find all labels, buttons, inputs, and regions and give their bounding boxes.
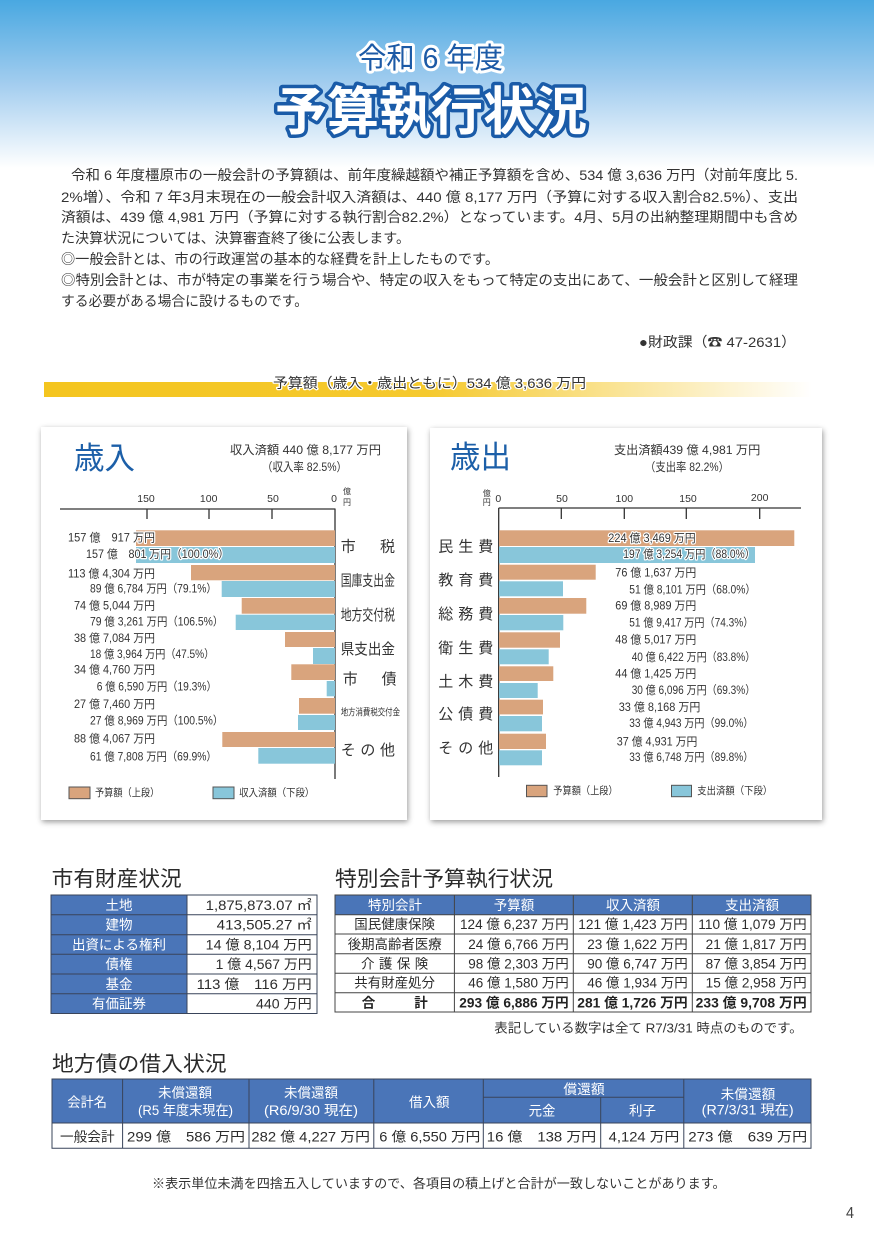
table: municipal property: 有価証券 xyxy=(92,997,146,1012)
intro text block: 令和 6 年度橿原市の一般会計の予算額は、前年度繰越額や補正予算額を含め、534 億 3,636 万円（対前年度比 5. xyxy=(71,167,798,183)
table: local bonds: 299 億 586 万円 xyxy=(127,1130,245,1144)
table: local bonds: 282 億 4,227 万円 xyxy=(251,1130,370,1144)
revenue legend: 収入済額（下段） xyxy=(239,786,314,799)
revenue categories: 地方交付税 xyxy=(341,607,395,624)
table: special accounts: 87 億 3,854 万円 xyxy=(706,956,807,972)
expenditure values: 51 億 9,417 万円（74.3%） xyxy=(629,616,753,629)
panel: expenditure xyxy=(430,428,822,820)
table: municipal property: 440 万円 xyxy=(256,997,312,1012)
heading: special accounts: 特別会計予算執行状況 xyxy=(335,868,553,891)
expenditure values: 33 億 6,748 万円（89.8%） xyxy=(629,751,753,764)
revenue categories: 市税 xyxy=(341,538,395,556)
expenditure legend: 支出済額（下段） xyxy=(697,784,772,797)
panel: revenue xyxy=(41,427,407,820)
expenditure axis: 0 xyxy=(495,493,501,505)
revenue values: 88 億 4,067 万円 xyxy=(74,733,155,746)
table: local bonds: 一般会計 xyxy=(60,1130,115,1144)
expenditure values: 40 億 6,422 万円（83.8%） xyxy=(632,651,755,664)
expenditure axis: 億 xyxy=(483,488,491,498)
revenue categories: 市債 xyxy=(343,671,397,688)
expenditure values: 224 億 3,469 万円 xyxy=(608,532,696,545)
table: special accounts: 国民健康保険 xyxy=(354,916,435,932)
expenditure axis: 150 xyxy=(679,493,697,505)
table: special accounts: 23 億 1,622 万円 xyxy=(587,937,688,952)
table: municipal property: 土地 xyxy=(106,898,133,913)
table: special accounts: 共有財産処分 xyxy=(354,976,435,991)
expenditure values: 69 億 8,989 万円 xyxy=(615,600,696,613)
expenditure categories: 衛生費 xyxy=(438,640,493,657)
revenue axis: 0 xyxy=(331,493,337,505)
revenue values: 61 億 7,808 万円（69.9%） xyxy=(90,750,217,763)
revenue summary: （収入率 82.5%） xyxy=(262,460,347,474)
revenue categories: その他 xyxy=(341,742,395,759)
expenditure values: 44 億 1,425 万円 xyxy=(615,667,696,680)
page number: 4 xyxy=(846,1205,854,1222)
expenditure bars xyxy=(499,530,794,765)
table: special accounts: 98 億 2,303 万円 xyxy=(468,956,569,972)
expenditure axis: 円 xyxy=(483,498,491,507)
table: local bonds: 元金 xyxy=(529,1104,556,1118)
table: special accounts xyxy=(335,895,811,1012)
revenue values: 6 億 6,590 万円（19.3%） xyxy=(97,680,217,693)
expenditure categories: 公債費 xyxy=(438,706,493,723)
expenditure legend xyxy=(526,784,772,797)
revenue values: 34 億 4,760 万円 xyxy=(74,663,155,676)
table: municipal property: 基金 xyxy=(106,976,133,992)
revenue axis xyxy=(60,486,351,779)
contact: finance section: ●財政課（☎ 47-2631） xyxy=(639,334,796,350)
table: municipal property xyxy=(51,895,317,1014)
table: municipal property: 建物 xyxy=(106,918,132,933)
revenue summary xyxy=(230,443,381,474)
revenue values: 79 億 3,261 万円（106.5%） xyxy=(90,616,223,629)
header gradient background xyxy=(0,0,874,168)
expenditure values: 48 億 5,017 万円 xyxy=(615,633,696,646)
budget total banner: 予算額（歳入・歳出ともに）534 億 3,636 万円 xyxy=(273,375,586,391)
intro text block: 2%増）、令和 7 年3月末現在の一般会計収入済額は、440 億 8,177 万円（予算に対する収入割合82.5%）、支出 xyxy=(61,189,798,205)
heading: revenue: 歳入 xyxy=(74,441,135,476)
revenue legend xyxy=(69,786,314,799)
table: local bonds: 未償還額 xyxy=(284,1086,338,1100)
expenditure values: 76 億 1,637 万円 xyxy=(615,567,696,580)
expenditure categories: その他 xyxy=(438,740,493,757)
footnote: ※表示単位未満を四捨五入していますので、各項目の積上げと合計が一致しないことがあります。 xyxy=(152,1176,726,1191)
expenditure values: 37 億 4,931 万円 xyxy=(617,736,697,749)
table: special accounts: 110 億 1,079 万円 xyxy=(698,917,807,932)
title xyxy=(275,42,587,142)
table: special accounts: 293 億 6,886 万円 xyxy=(459,994,569,1010)
table: special accounts: 支出済額 xyxy=(725,898,779,913)
heading: local bonds: 地方債の借入状況 xyxy=(52,1053,227,1076)
table: special accounts: 233 億 9,708 万円 xyxy=(696,994,807,1010)
revenue values: 157 億 801 万円（100.0%） xyxy=(86,548,229,561)
expenditure categories: 民生費 xyxy=(438,538,493,556)
expenditure axis xyxy=(483,488,801,777)
table: local bonds: 273 億 639 万円 xyxy=(688,1130,807,1144)
revenue values: 27 億 8,969 万円（100.5%） xyxy=(90,714,223,727)
revenue values: 113 億 4,304 万円 xyxy=(68,567,155,580)
revenue legend: 予算額（上段） xyxy=(95,786,159,799)
expenditure values: 33 億 4,943 万円（99.0%） xyxy=(629,717,753,730)
revenue values: 89 億 6,784 万円（79.1%） xyxy=(90,583,217,596)
table: special accounts: 281 億 1,726 万円 xyxy=(577,994,688,1010)
revenue axis: 円 xyxy=(343,498,351,507)
table: local bonds xyxy=(52,1079,811,1148)
revenue values: 74 億 5,044 万円 xyxy=(74,599,155,612)
revenue categories: 国庫支出金 xyxy=(341,572,395,590)
table: local bonds: 借入額 xyxy=(409,1095,450,1110)
title: 予算執行状況 xyxy=(275,84,587,142)
budget total banner xyxy=(44,375,812,397)
intro text block: た決算状況については、決算審査終了後に公表します。 xyxy=(61,230,410,246)
expenditure summary: （支出率 82.2%） xyxy=(645,460,729,474)
table: special accounts: 後期高齢者医療 xyxy=(348,936,442,952)
table note: 表記している数字は全て R7/3/31 時点のものです。 xyxy=(494,1020,803,1036)
expenditure axis: 50 xyxy=(556,493,568,505)
table: local bonds: (R6/9/30 現在) xyxy=(264,1103,358,1118)
table: special accounts: 46 億 1,934 万円 xyxy=(587,976,688,991)
table: special accounts: 46 億 1,580 万円 xyxy=(468,976,569,991)
intro text block xyxy=(61,167,798,309)
revenue bars xyxy=(136,530,335,764)
table: local bonds: 未償還額 xyxy=(721,1087,776,1102)
table: local bonds: 4,124 万円 xyxy=(609,1130,679,1144)
table: special accounts: 90 億 6,747 万円 xyxy=(587,956,688,972)
table: local bonds: 16 億 138 万円 xyxy=(487,1130,596,1144)
revenue values xyxy=(68,532,229,763)
table: municipal property: 14 億 8,104 万円 xyxy=(206,937,312,952)
revenue axis: 50 xyxy=(267,493,279,505)
intro text block: 済額は、439 億 4,981 万円（予算に対する執行割合82.2%）となっています。4月、5月の出納整理期間中も含め xyxy=(61,209,798,225)
expenditure categories: 総務費 xyxy=(438,606,493,623)
expenditure values xyxy=(608,532,756,764)
revenue summary: 収入済額 440 億 8,177 万円 xyxy=(230,443,381,457)
table: special accounts: 予算額 xyxy=(494,898,535,913)
expenditure axis: 100 xyxy=(616,493,633,505)
table: municipal property: 1 億 4,567 万円 xyxy=(216,957,312,972)
intro text block: ◎特別会計とは、市が特定の事業を行う場合や、特定の収入をもって特定の支出にあて、一般会計と区別して経理 xyxy=(61,272,798,288)
intro text block: する必要がある場合に設けるものです。 xyxy=(61,293,308,309)
revenue values: 18 億 3,964 万円（47.5%） xyxy=(90,648,214,661)
table: municipal property: 債権 xyxy=(106,956,132,972)
table: special accounts: 124 億 6,237 万円 xyxy=(460,917,569,932)
table: local bonds: (R7/3/31 現在) xyxy=(702,1102,794,1118)
intro text block: ◎一般会計とは、市の行政運営の基本的な経費を計上したものです。 xyxy=(61,251,499,267)
table: local bonds: 未償還額 xyxy=(158,1086,212,1100)
table: municipal property: 413,505.27 ㎡ xyxy=(217,918,312,933)
heading: municipal property: 市有財産状況 xyxy=(52,868,182,891)
table: special accounts: 15 億 2,958 万円 xyxy=(706,976,807,991)
table: special accounts: 121 億 1,423 万円 xyxy=(578,917,688,932)
table: special accounts: 特別会計 xyxy=(368,898,422,913)
table: special accounts: 合計 xyxy=(362,996,428,1010)
table: local bonds: 6 億 6,550 万円 xyxy=(379,1130,480,1144)
expenditure values: 30 億 6,096 万円（69.3%） xyxy=(632,684,755,697)
title: 令和 6 年度 xyxy=(358,42,503,75)
expenditure summary: 支出済額439 億 4,981 万円 xyxy=(614,443,760,457)
table: local bonds: (R5 年度末現在) xyxy=(138,1103,233,1118)
expenditure values: 33 億 8,168 万円 xyxy=(619,701,700,714)
revenue axis: 150 xyxy=(137,493,155,505)
table: municipal property: 1,875,873.07 ㎡ xyxy=(206,898,312,913)
revenue axis: 億 xyxy=(343,486,351,496)
revenue categories: 県支出金 xyxy=(341,641,395,658)
revenue categories: 地方消費税交付金 xyxy=(341,707,400,719)
revenue categories xyxy=(341,538,400,759)
revenue values: 38 億 7,084 万円 xyxy=(74,632,155,645)
expenditure summary xyxy=(614,443,760,474)
table: local bonds: 利子 xyxy=(629,1104,656,1118)
table: special accounts: 24 億 6,766 万円 xyxy=(468,937,569,952)
expenditure legend: 予算額（上段） xyxy=(553,784,618,797)
table: local bonds: 償還額 xyxy=(563,1082,605,1097)
table: municipal property: 出資による権利 xyxy=(72,936,166,952)
table: municipal property: 113 億 116 万円 xyxy=(197,977,312,992)
revenue axis: 100 xyxy=(200,493,218,505)
expenditure values: 51 億 8,101 万円（68.0%） xyxy=(629,583,756,596)
expenditure categories: 教育費 xyxy=(438,572,493,589)
heading: expenditure: 歳出 xyxy=(450,440,511,475)
revenue values: 27 億 7,460 万円 xyxy=(74,698,155,711)
expenditure axis: 200 xyxy=(751,492,769,504)
table: special accounts: 介護保険 xyxy=(361,956,429,972)
table: special accounts: 21 億 1,817 万円 xyxy=(706,937,807,952)
expenditure categories: 土木費 xyxy=(438,674,493,690)
table: local bonds: 会計名 xyxy=(67,1095,107,1110)
expenditure values: 197 億 3,254 万円（88.0%） xyxy=(623,548,755,561)
expenditure categories xyxy=(438,538,493,757)
revenue values: 157 億 917 万円 xyxy=(68,532,155,545)
table: special accounts: 収入済額 xyxy=(606,898,660,913)
